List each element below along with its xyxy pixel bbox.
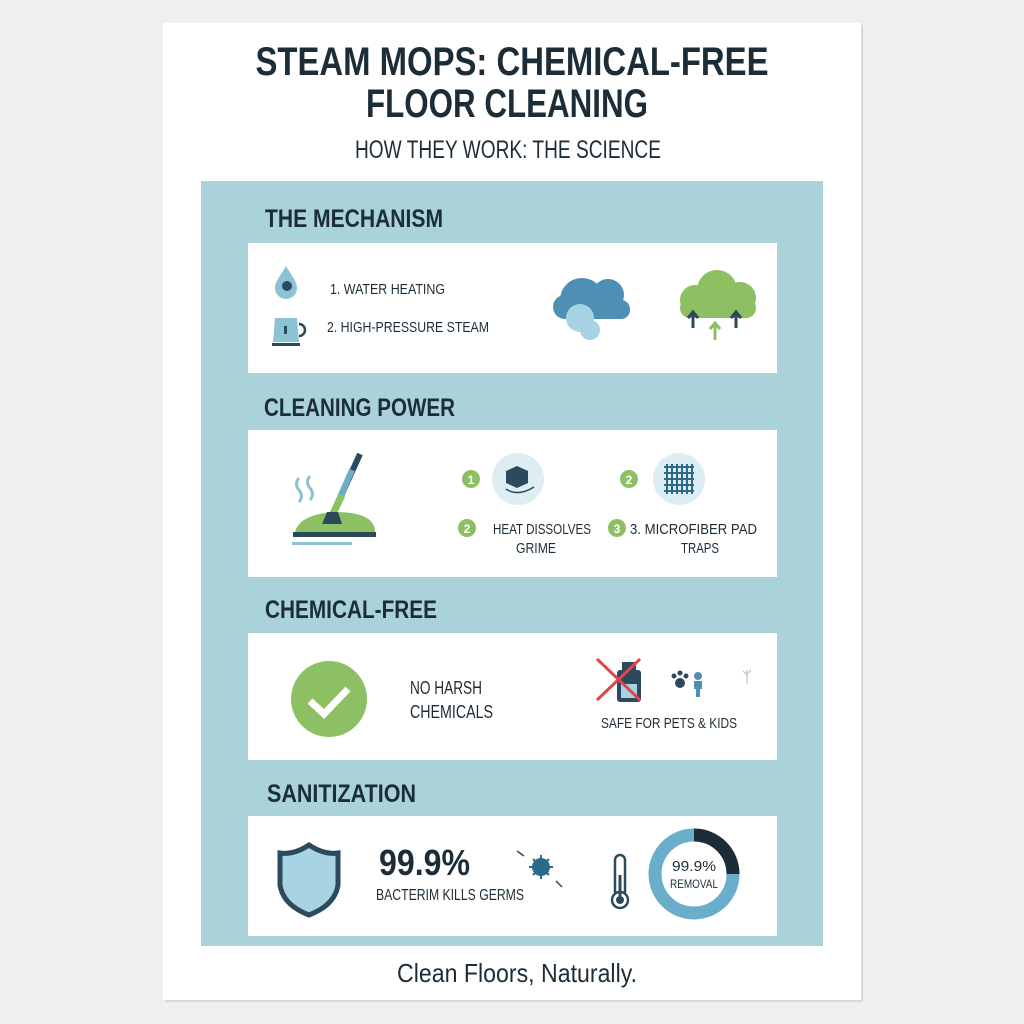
icon: thermometer — [612, 855, 628, 908]
item: heat dissolves grime: HEAT DISSOLVES — [493, 521, 591, 538]
icon: crossed bottle, pet, kid — [597, 659, 751, 702]
donut chart — [655, 835, 733, 913]
item: microfiber pad traps: 3. MICROFIBER PAD — [630, 521, 757, 538]
icon: kettle — [272, 318, 305, 346]
text: no harsh chemicals: NO HARSH — [410, 678, 482, 698]
subtitle: HOW THEY WORK: THE SCIENCE — [355, 136, 661, 164]
text: water heating: 1. WATER HEATING — [330, 281, 445, 298]
icon: germ — [517, 851, 562, 887]
item: microfiber pad traps: TRAPS — [681, 540, 719, 557]
text: safe for pets & kids: SAFE FOR PETS & KIDS — [601, 715, 737, 732]
title: FLOOR CLEANING — [366, 82, 648, 126]
item: microfiber pad traps: 3 — [614, 522, 621, 536]
stat: 99.9%: BACTERIM KILLS GERMS — [376, 887, 524, 904]
icon: check circle — [291, 661, 367, 737]
item: heat dissolves grime: GRIME — [516, 540, 556, 557]
card background — [163, 23, 863, 1002]
text: high-pressure steam: 2. HIGH-PRESSURE STEAM — [327, 319, 489, 336]
panel: chemical-free — [248, 633, 777, 760]
heading: sanitization: SANITIZATION — [267, 780, 416, 808]
panel: cleaning power — [248, 430, 777, 577]
icon: shield — [280, 845, 338, 915]
stat: 99.9%: 99.9% — [379, 842, 470, 883]
title — [256, 40, 768, 126]
item: heat dissolves grime: 1 — [468, 473, 475, 487]
text: no harsh chemicals — [410, 678, 493, 722]
heading: cleaning power: CLEANING POWER — [264, 394, 455, 422]
icon: green cloud with arrows — [680, 270, 756, 340]
donut chart: REMOVAL — [670, 877, 718, 891]
icon: water drop — [275, 266, 297, 299]
panel: mechanism — [248, 243, 777, 373]
item: heat dissolves grime — [458, 453, 591, 557]
stat: 99.9% — [376, 842, 524, 904]
item: microfiber pad traps — [608, 453, 757, 557]
icon: steam mop — [292, 454, 376, 545]
item: microfiber pad traps: 2 — [626, 473, 633, 487]
donut chart: 99.9% — [672, 858, 716, 875]
footer tagline: Clean Floors, Naturally. — [397, 958, 637, 988]
panel: sanitization — [248, 816, 777, 936]
text: no harsh chemicals: CHEMICALS — [410, 702, 493, 722]
heading: chemical-free: CHEMICAL-FREE — [265, 596, 437, 624]
heading: the mechanism: THE MECHANISM — [265, 205, 443, 233]
main panel — [201, 181, 823, 946]
item: heat dissolves grime: 2 — [464, 522, 471, 536]
title: STEAM MOPS: CHEMICAL-FREE — [256, 40, 768, 84]
icon: steam cloud — [553, 278, 630, 340]
